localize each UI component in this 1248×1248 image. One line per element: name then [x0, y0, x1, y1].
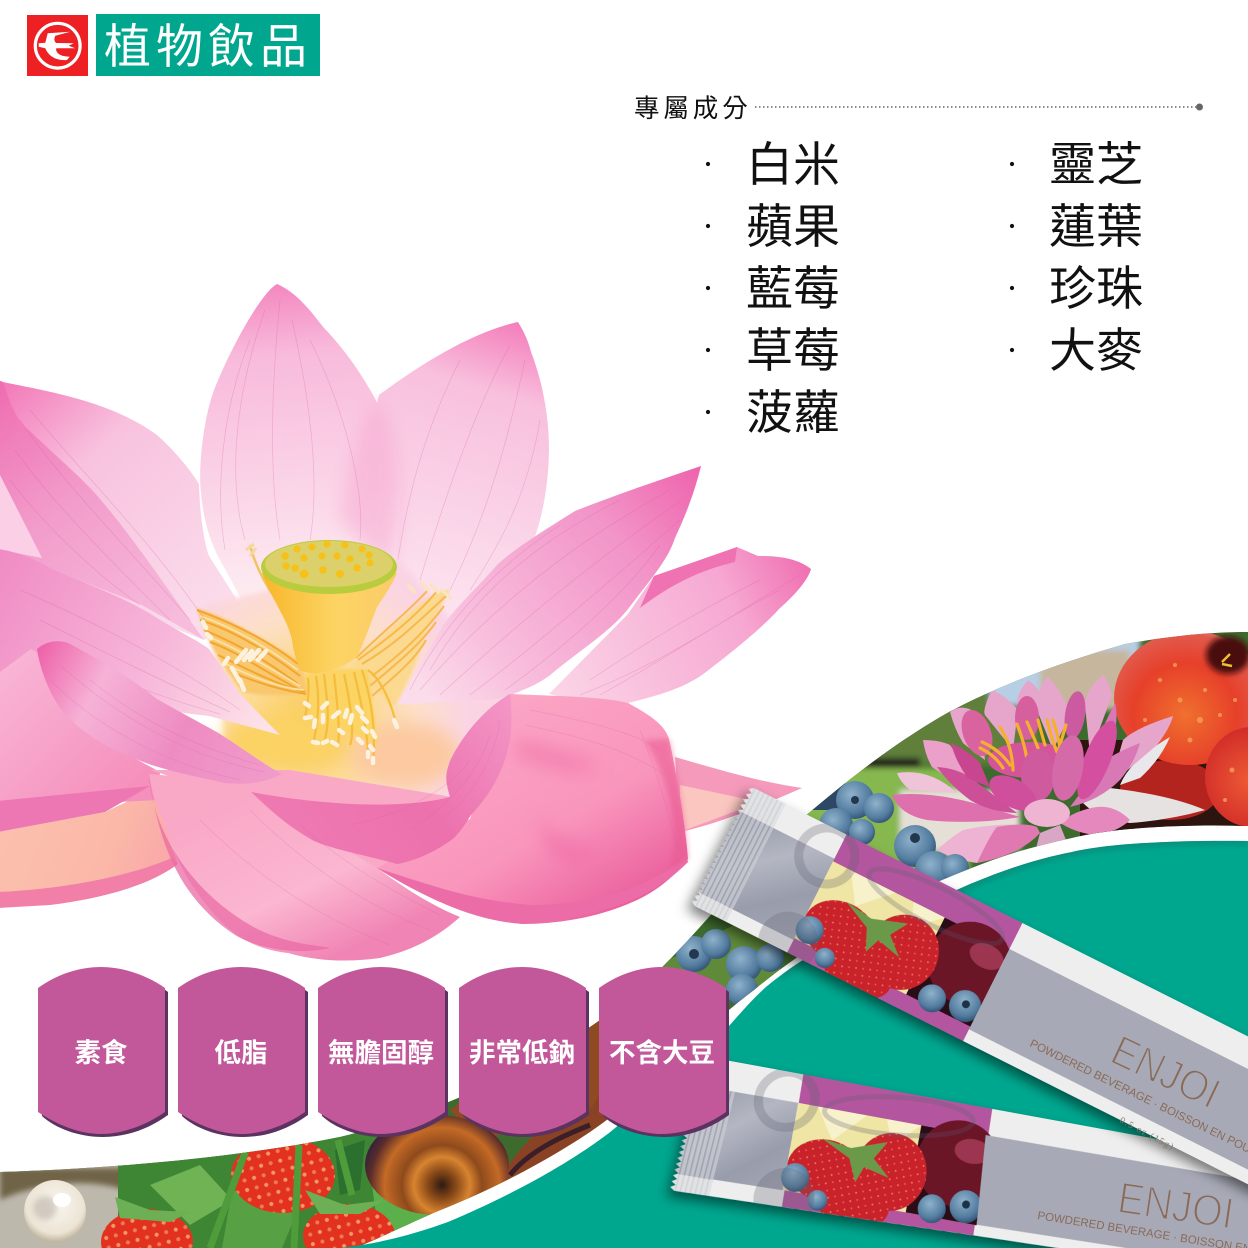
ingredient list: right column	[1010, 138, 1143, 377]
lily back petals	[897, 675, 1173, 795]
petal: back centre	[200, 284, 401, 615]
petal: bottom front	[149, 774, 460, 961]
lily inner petals	[1070, 743, 1140, 807]
petal base under front petals	[150, 770, 470, 870]
petal veins: lower petals	[50, 665, 678, 945]
lily front bud	[1024, 799, 1070, 827]
petal: lower left dark rim	[0, 786, 150, 832]
band segment: upper right backdrop	[807, 641, 1246, 879]
product packet: upper	[681, 786, 1248, 1200]
petal: left middle pale	[0, 549, 280, 735]
ingredient list: left column	[706, 138, 840, 439]
badge: vegetarian: 素食	[74, 1038, 128, 1068]
ingredient list: left column: 蘋果	[746, 200, 840, 253]
brand text: ENJOI	[1104, 1026, 1228, 1118]
stamens: left fringe	[197, 608, 310, 695]
pod seeds	[281, 540, 374, 578]
apples	[1114, 631, 1248, 827]
badge: soy free	[599, 967, 729, 1137]
stamens: bottom bundle	[246, 544, 397, 763]
icon: red swallow logo	[27, 15, 88, 76]
ingredient list: left column: 草莓	[746, 324, 840, 377]
petal: lower left peach	[0, 790, 178, 908]
reishi mushrooms	[365, 1020, 608, 1215]
petal: far right	[549, 547, 811, 703]
photo band: fruits, lily and mushrooms	[0, 620, 1248, 1248]
water lily	[892, 675, 1205, 863]
petal: back right	[361, 322, 549, 630]
strawberry patch	[101, 1130, 440, 1248]
petal: upper left light	[0, 382, 246, 640]
blueberries upper	[812, 781, 969, 882]
product packet: lower	[658, 1050, 1248, 1248]
lily low petals	[937, 824, 1015, 863]
centre bowl glow	[205, 560, 520, 800]
lily white petal	[1083, 788, 1205, 823]
lily stamens	[980, 720, 1066, 770]
badge: no cholesterol: 無膽固醇	[328, 1038, 434, 1068]
petal: lower left pink	[0, 640, 160, 808]
teal background panel	[300, 830, 1248, 1248]
lotus seed pod	[261, 540, 397, 673]
petal: left pale sliver	[0, 475, 42, 558]
badge: very low sodium: 非常低鈉	[469, 1038, 575, 1068]
brand text: ENJOI	[1115, 1172, 1237, 1238]
packet body	[658, 1050, 1248, 1248]
petal: front left curl	[37, 641, 282, 784]
lotus flower	[0, 284, 811, 961]
ingredient list: left column: 藍莓	[746, 262, 840, 315]
petal: far right spike	[675, 757, 802, 832]
badge: low fat: 低脂	[214, 1038, 268, 1068]
blueberries lower	[662, 926, 784, 1004]
badge: low fat	[178, 967, 308, 1137]
packet body	[681, 786, 1248, 1200]
petal veins: right and upper left	[10, 300, 800, 714]
petal: lower left peach rim	[0, 858, 178, 908]
ingredient list: left column: 白米	[746, 138, 840, 191]
petal: bottom right large	[377, 694, 688, 924]
badge: soy free: 不含大豆	[609, 1038, 715, 1068]
petal: front curled rim	[251, 694, 512, 864]
ingredient list: right column: 靈芝	[1049, 138, 1143, 191]
net weight: 0.5 oz (15g)	[1118, 1115, 1176, 1153]
badge: very low sodium	[459, 967, 589, 1137]
ingredient list: right column: 珍珠	[1049, 262, 1143, 315]
section heading: exclusive ingredients	[634, 95, 1203, 123]
ingredient list: left column: 菠蘿	[746, 386, 840, 439]
pearl in shell	[0, 1165, 128, 1248]
title banner: 植物飲品	[104, 20, 312, 73]
section heading: exclusive ingredients: 專屬成分	[634, 95, 752, 123]
petal: upper left dark fold	[0, 380, 204, 640]
badge: vegetarian	[38, 967, 168, 1137]
stamens: right fringe	[352, 583, 450, 708]
badge: no cholesterol	[318, 967, 448, 1137]
petal: right large	[397, 466, 701, 705]
ingredient list: right column: 蓮葉	[1049, 200, 1143, 253]
ingredient list: right column: 大麥	[1049, 324, 1143, 377]
